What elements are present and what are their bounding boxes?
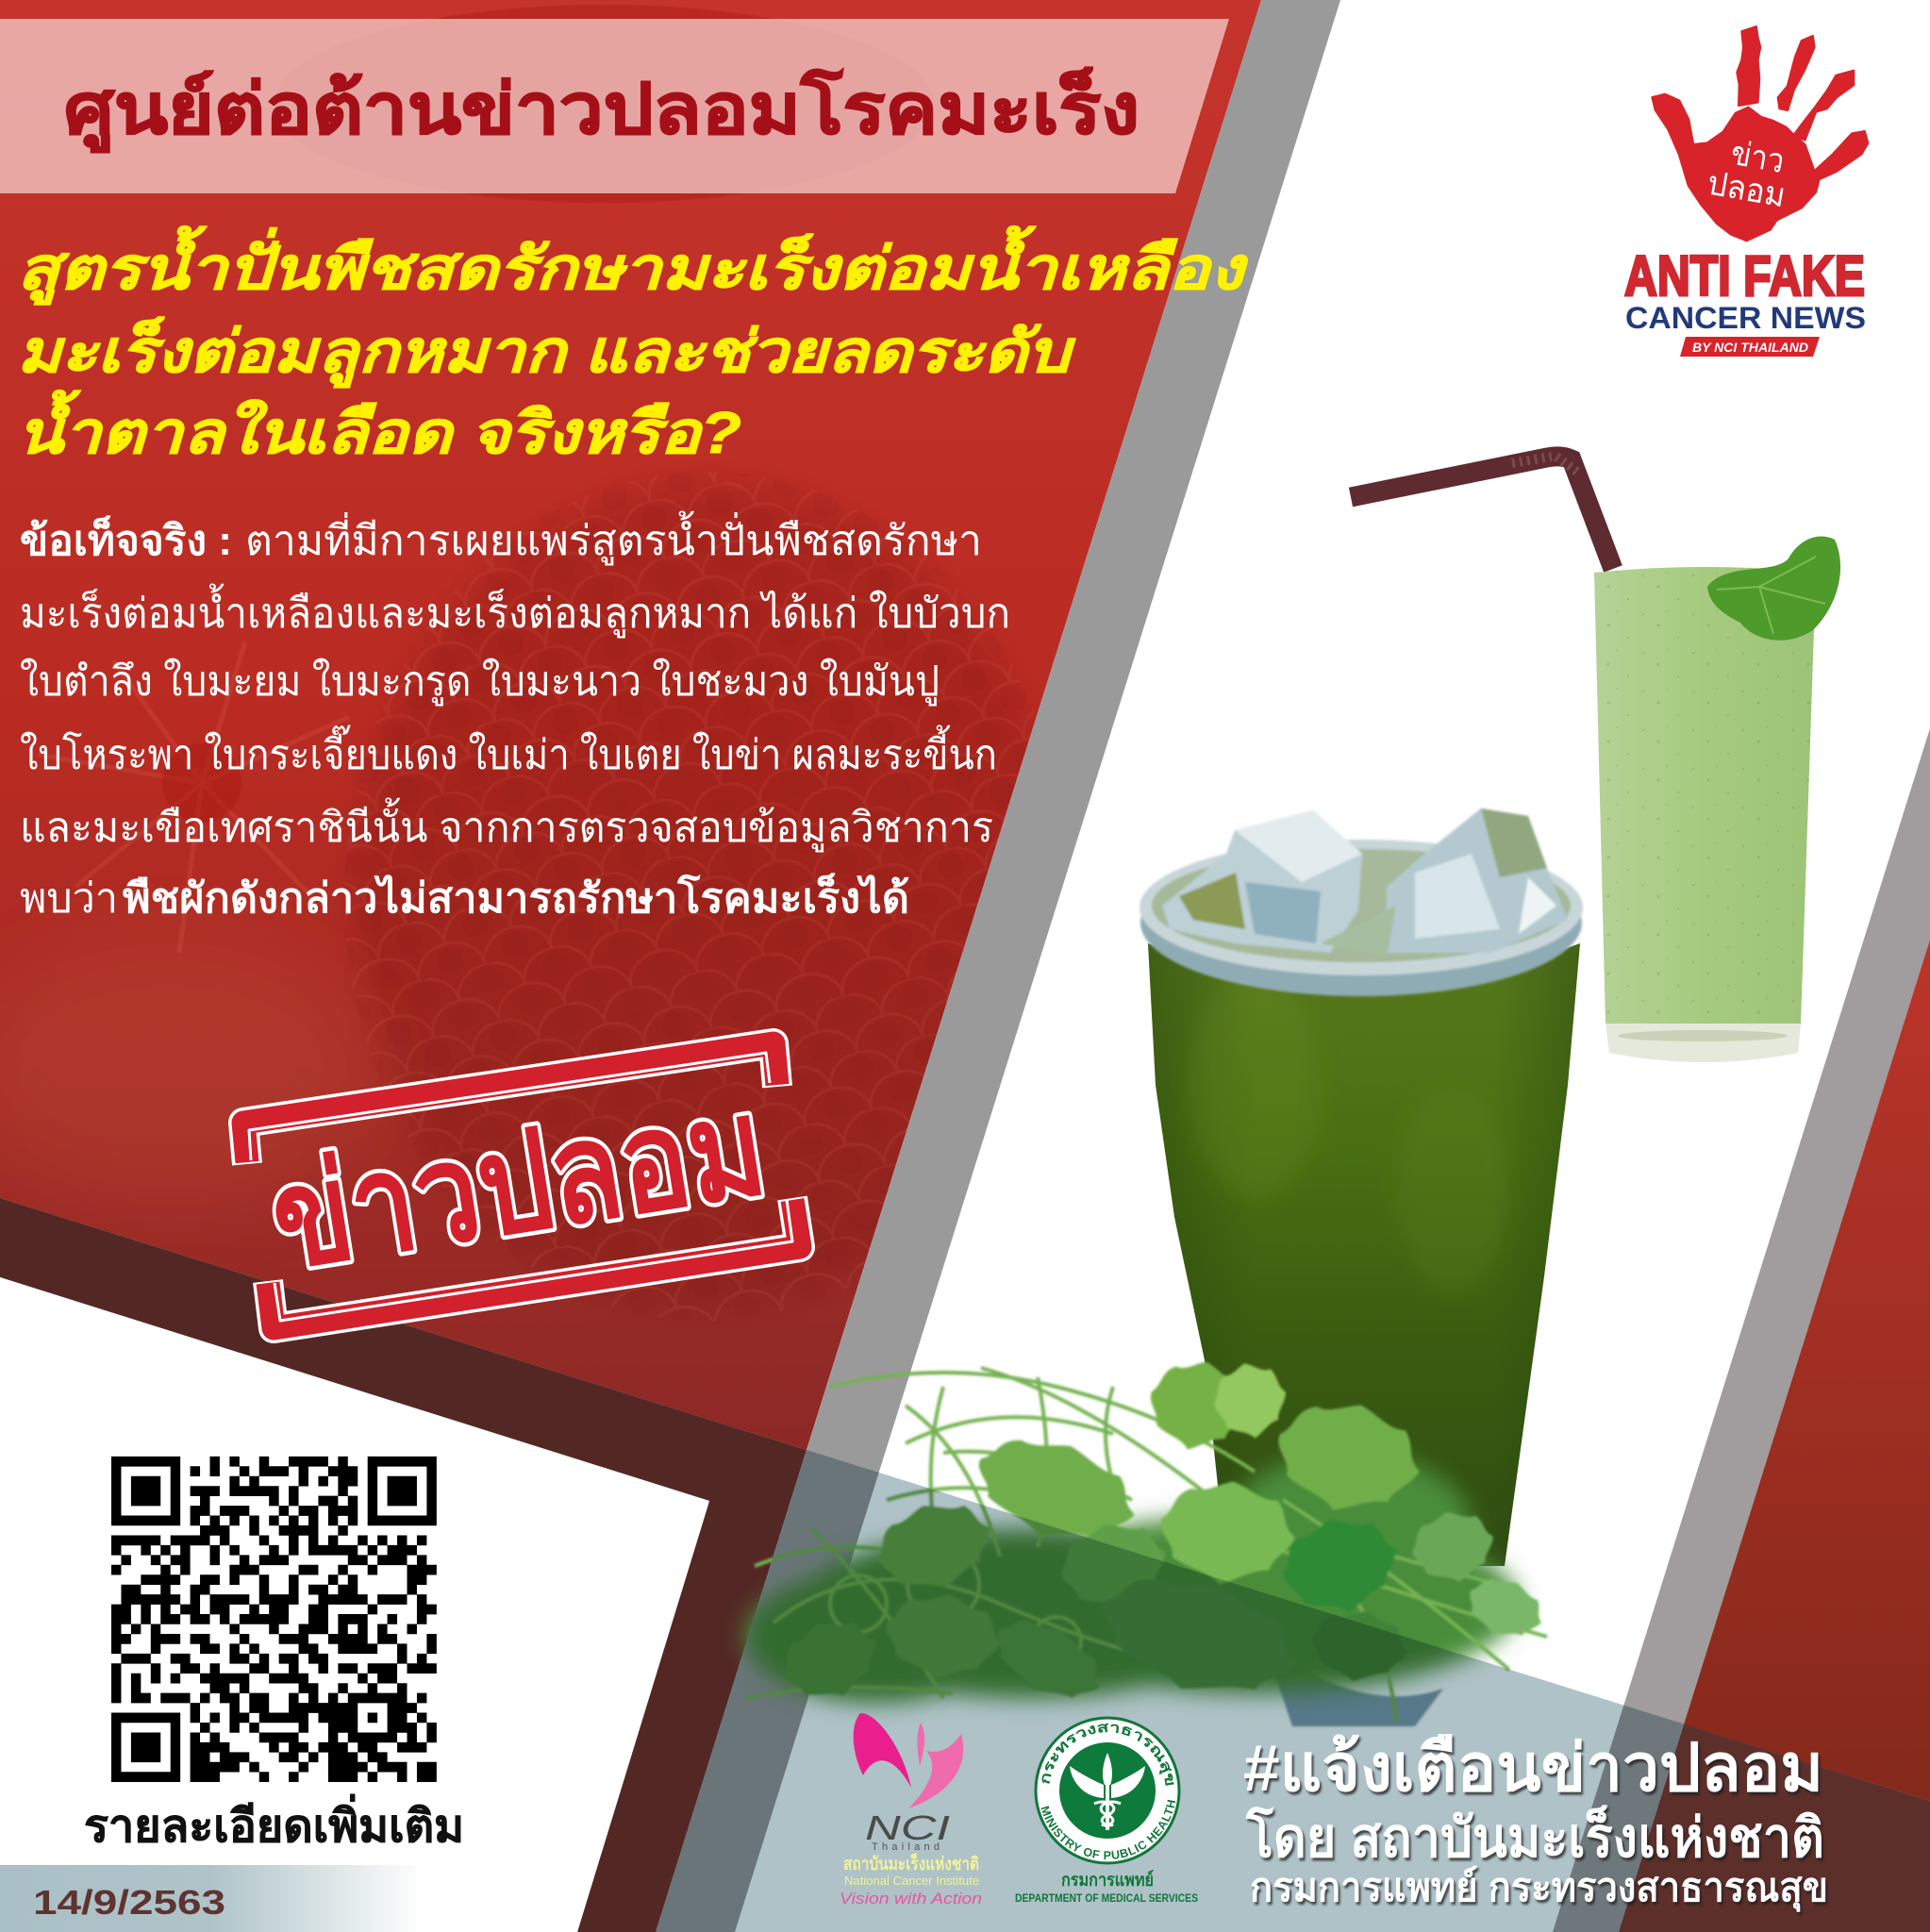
panel: dark brown frame around QR	[0, 1198, 807, 1932]
headline question: น้ำตาลในเลือด จริงหรือ?	[17, 390, 741, 466]
body text: fact check: ตามที่มีการเผยแพร่สูตรน้ำปั่นพืชสดรักษา	[245, 510, 982, 566]
body text: fact check: ข้อเท็จจริง :	[20, 515, 232, 564]
icon: red hand print: ปลอม	[1705, 164, 1789, 214]
panel: red right triangle	[1684, 940, 1930, 1801]
headline question	[17, 225, 1249, 466]
date: 14/9/2563	[33, 1883, 225, 1922]
decorative grey diagonal band right	[1553, 728, 1930, 1932]
icon: caduceus	[1070, 1753, 1145, 1830]
body text: fact check: พบว่า	[20, 875, 118, 922]
footer text: hashtag and publisher	[1243, 1731, 1828, 1912]
body text: fact check: ใบโหระพา ใบกระเจี๊ยบแดง ใบเม่า ใบเตย ใบข่า ผลมะระขี้นก	[20, 724, 997, 778]
body text: fact check: พืชผักดังกล่าวไม่สามารถรักษาโรคมะเร็งได้	[123, 873, 909, 922]
logo: national cancer institute: Thailand	[872, 1841, 940, 1853]
qr caption: รายละเอียดเพิ่มเติม	[84, 1793, 464, 1852]
panel: white QR area	[0, 1277, 709, 1932]
body text: fact check: และมะเขือเทศราชินีนั้น จากการตรวจสอบข้อมูลวิชาการ	[20, 797, 993, 853]
panel: header strip	[0, 19, 1229, 193]
logo: anti fake cancer news: BY NCI THAILAND	[1692, 341, 1808, 355]
decorative grey diagonal band left	[656, 0, 1340, 1932]
logo: national cancer institute: National Cancer Institute	[844, 1874, 979, 1888]
logo: ministry of public health seal: DEPARTMENT OF MEDICAL SERVICES	[1015, 1893, 1198, 1905]
headline question: สูตรน้ำปั่นพืชสดรักษามะเร็งต่อมน้ำเหลือง	[17, 225, 1249, 306]
logo: ministry of public health seal: MINISTRY OF PUBLIC HEALTH	[1040, 1800, 1175, 1859]
title: ศูนย์ต่อต้านข่าวปลอมโรคมะเร็ง	[64, 68, 1140, 153]
footer text: hashtag and publisher: #แจ้งเตือนข่าวปลอม	[1243, 1731, 1823, 1805]
panel: red main background	[0, 0, 1261, 1450]
logo: national cancer institute	[840, 1713, 982, 1907]
logo: national cancer institute: Vision with Action	[840, 1890, 982, 1907]
qr code	[111, 1461, 437, 1777]
logo: ministry of public health seal: กระทรวงสาธารณสุข	[1041, 1723, 1173, 1786]
body text: fact check: ใบตำลึง ใบมะยม ใบมะกรูด ใบมะนาว ใบชะมวง ใบมันปู	[20, 658, 940, 707]
photo: pile of green leaves and vines	[745, 1352, 1552, 1726]
body text: fact check: มะเร็งต่อมน้ำเหลืองและมะเร็งต่อมลูกหมาก ได้แก่ ใบบัวบก	[20, 583, 1010, 639]
footer text: hashtag and publisher: กรมการแพทย์ กระทรวงสาธารณสุข	[1250, 1865, 1828, 1912]
logo: anti fake cancer news	[1624, 26, 1868, 357]
logo: national cancer institute: NCI	[865, 1808, 950, 1847]
icon: red hand print	[1653, 26, 1868, 241]
logo: ministry of public health seal: กรมการแพทย์	[1061, 1870, 1154, 1890]
date band	[0, 1865, 424, 1932]
logo: anti fake cancer news: CANCER NEWS	[1625, 301, 1866, 335]
panel: slate footer overlay	[656, 1450, 1930, 1932]
photo: dark green juice glass with ice	[1140, 808, 1583, 1566]
headline question: มะเร็งต่อมลูกหมาก และช่วยลดระดับ	[17, 316, 1075, 389]
icon: red hand print: ข่าว	[1728, 135, 1788, 180]
footer text: hashtag and publisher: โดย สถาบันมะเร็งแห่งชาติ	[1245, 1805, 1824, 1869]
panel: brown footer corner	[1619, 1724, 1930, 1932]
logo: national cancer institute: สถาบันมะเร็งแห่งชาติ	[843, 1852, 979, 1874]
logo: anti fake cancer news: ANTI FAKE	[1624, 244, 1865, 308]
body text: fact check	[20, 510, 1010, 922]
logo: ministry of public health seal	[1015, 1717, 1198, 1905]
photo: green smoothie glass with straw and leaf	[1351, 457, 1840, 1062]
stamp: fake news: ข่าวปลอม	[261, 1068, 774, 1298]
